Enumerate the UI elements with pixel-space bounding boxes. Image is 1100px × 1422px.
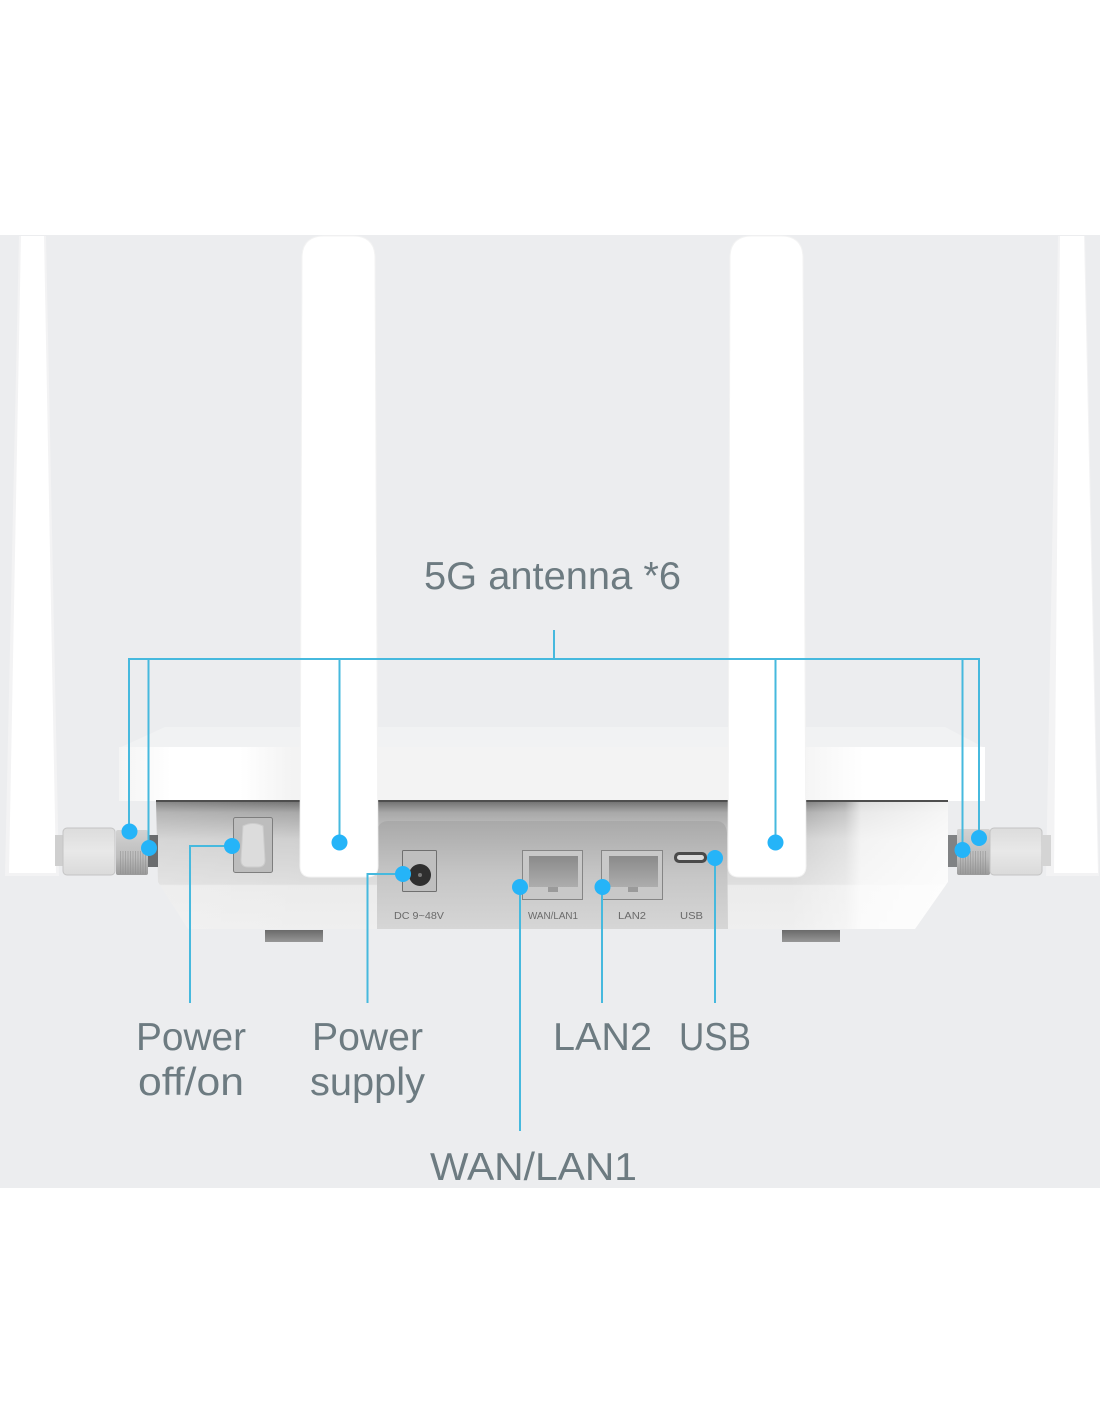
USB small label: USB (680, 911, 703, 922)
label: 5G antenna: 5G antenna *6 (424, 555, 681, 598)
power switch (234, 818, 272, 872)
label: USB: USB (679, 1016, 751, 1059)
left antenna connector (55, 828, 158, 875)
far right antenna (1046, 236, 1099, 876)
label: Power supply: Power (312, 1016, 423, 1059)
DC jack (402, 850, 436, 892)
WAN/LAN1 port (522, 850, 582, 900)
WAN/LAN1 label: WAN/LAN1 (528, 911, 578, 922)
label: Power off/on (136, 1016, 246, 1104)
inner right antenna (728, 236, 806, 877)
label: Power supply (310, 1016, 426, 1104)
callout line: USB (714, 858, 716, 1003)
right antenna connector (948, 828, 1051, 875)
label: Power supply: supply (310, 1061, 426, 1104)
callout dots (122, 824, 987, 895)
callout line: LAN2 (601, 887, 603, 1003)
callout line: power switch (190, 846, 232, 1003)
inner left antenna (300, 236, 378, 877)
label: LAN2: LAN2 (553, 1016, 652, 1059)
icon: router illustration (5, 236, 1099, 942)
background panel (0, 235, 1100, 1188)
label: WAN/LAN1: WAN/LAN1 (430, 1146, 637, 1189)
router rear body (156, 800, 948, 929)
LAN2 small label: LAN2 (618, 911, 646, 922)
DC label: DC 9~48V (394, 911, 444, 922)
label: Power off/on: off/on (138, 1061, 244, 1104)
rubber foot right (782, 930, 840, 942)
far left antenna (5, 236, 59, 876)
LAN2 port (602, 850, 662, 900)
router top shell (119, 727, 985, 801)
rubber foot left (265, 930, 323, 942)
callout line: WAN/LAN1 (519, 887, 521, 1131)
USB port (674, 852, 707, 863)
label: Power off/on: Power (136, 1016, 246, 1059)
port panel (377, 821, 728, 929)
callout lines: 5G antenna (129, 630, 979, 850)
callout line: power supply (368, 874, 403, 1003)
